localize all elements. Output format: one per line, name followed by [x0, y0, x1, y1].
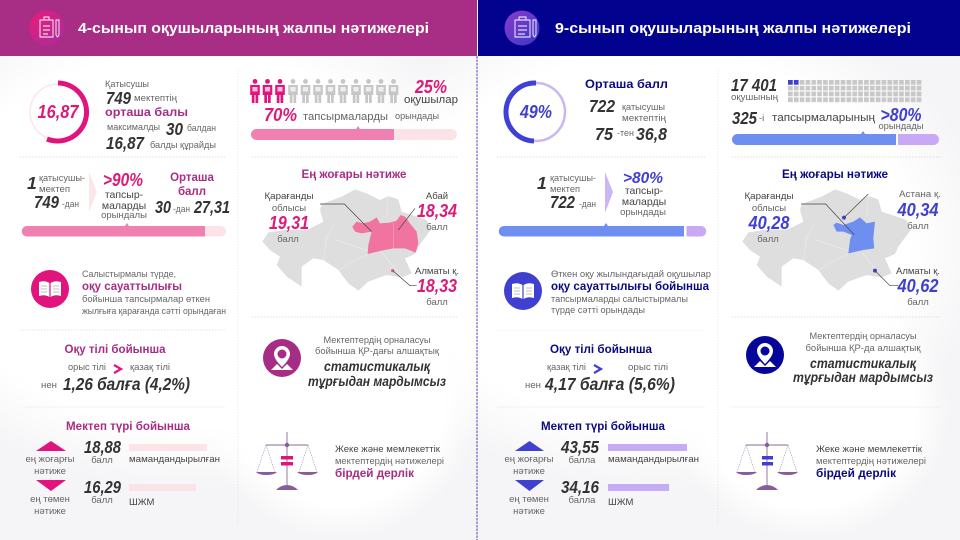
text: location: тұрғыдан мардымсыз: [793, 370, 933, 385]
text: reading literacy: оқу сауаттылығы бойынша: [551, 281, 710, 293]
school performance text: тапсыр-: [625, 185, 664, 197]
waffle caption: орындады: [878, 121, 924, 132]
heading: language: орыс тілі: [628, 362, 668, 373]
school performance text: маларды: [622, 196, 666, 208]
school performance text: Орташа: [170, 172, 215, 184]
school type section: мамандандырылған: [608, 454, 699, 465]
average score text: 36,8: [636, 124, 667, 144]
location icon: [263, 339, 301, 377]
school performance text: >80%: [623, 170, 663, 187]
text: location: статистикалық: [810, 356, 917, 371]
school performance text: балл: [178, 186, 206, 198]
school type section: Мектеп түрі бойынша: [541, 421, 666, 433]
heading: language: нен: [525, 380, 541, 391]
text: school ownership: Жеке және мемлекеттік: [816, 444, 923, 455]
school performance text: қатысушы-: [39, 173, 85, 184]
map labels: grade 9: Астана қ.: [899, 189, 941, 200]
average score text: мектептің: [134, 93, 178, 104]
map labels: grade 4: [264, 191, 459, 308]
school type section: нәтиже: [34, 466, 66, 477]
average score donut: [506, 83, 565, 141]
school type section: нәтиже: [513, 506, 545, 517]
header: grade 4: [0, 0, 477, 56]
school performance text: тапсыр-: [105, 189, 144, 201]
icon: book: [504, 272, 542, 310]
text: location: Мектептердің орналасуы: [324, 335, 431, 346]
text: school ownership: бірдей дерлік: [816, 468, 896, 480]
text: reading literacy: оқу сауаттылығы: [82, 281, 182, 293]
average score text: орташа балы: [105, 107, 188, 119]
map labels: grade 4: балл: [426, 222, 448, 233]
map labels: grade 4: балл: [426, 297, 448, 308]
text: reading literacy: Өткен оқу жылындағыдай оқушылар: [551, 269, 711, 280]
school type section: 43,55: [560, 437, 599, 457]
icon: clipboard: [30, 10, 64, 46]
map labels: grade 9: Алматы қ.: [896, 266, 940, 277]
text: location: бойынша ҚР-дағы алшақтық: [315, 346, 440, 357]
triangle down: [515, 480, 544, 491]
map labels: grade 4: 18,34: [417, 201, 457, 221]
map: Kazakhstan grade 4: [262, 189, 431, 291]
map labels: grade 9: балл: [907, 297, 929, 308]
text: reading literacy: [551, 269, 711, 316]
heading: top results: Ең жоғары нәтиже: [302, 169, 406, 181]
waffle caption: -і: [759, 113, 764, 124]
map labels: grade 4: Алматы қ.: [415, 266, 459, 277]
school performance text: 722: [550, 192, 575, 212]
school performance text: >90%: [103, 170, 143, 190]
school type section: Мектеп түрі бойынша: [66, 421, 191, 433]
highlighted regions: [352, 215, 418, 254]
panel: grade 9 results: [478, 0, 960, 525]
map labels: grade 4: 18,33: [417, 276, 457, 296]
school performance text: 1: [27, 173, 37, 193]
people chart caption: [264, 77, 458, 125]
school performance text: қатысушы-: [550, 173, 596, 184]
school performance text: мектеп: [550, 184, 580, 195]
heading: language: Оқу тілі бойынша: [64, 344, 166, 356]
arrow: [605, 172, 613, 213]
map labels: grade 9: Қарағанды: [744, 191, 794, 202]
progress bar: 80%: [499, 223, 706, 236]
text: reading literacy: бойынша тапсырмалар өткен: [82, 294, 210, 305]
waffle caption: тапсырмаларының: [772, 112, 875, 124]
people chart caption: тапсырмаларды: [303, 111, 388, 123]
triangle up: [515, 441, 544, 451]
heading: language: қазақ тілі: [130, 362, 170, 373]
people chart caption: орындады: [395, 111, 439, 122]
chevron: [114, 365, 121, 373]
location icon: [746, 336, 784, 374]
school performance text: -дан: [579, 199, 596, 210]
school performance text: [27, 170, 230, 221]
school type section: ШЖМ: [608, 497, 633, 508]
average score text: мектептің: [622, 113, 667, 124]
school performance text: [537, 170, 666, 218]
text: location: [793, 331, 933, 385]
waffle caption: оқушының: [731, 92, 779, 103]
map labels: grade 9: 40,62: [897, 276, 938, 296]
text: reading literacy: түрде сәтті орындады: [551, 305, 645, 316]
waffle caption: >80%: [880, 105, 922, 125]
average score text: 16,87: [106, 133, 145, 153]
panel: grade 4 results: [0, 0, 477, 525]
average score text: 75: [595, 124, 613, 144]
school type section: ең төмен: [509, 494, 549, 505]
text: location: тұрғыдан мардымсыз: [308, 374, 446, 389]
chevron: [594, 365, 601, 373]
average score text: 30: [166, 119, 183, 139]
map labels: grade 9: [744, 189, 941, 308]
map labels: grade 4: балл: [277, 234, 299, 245]
icon: book: [31, 270, 69, 308]
school type section: нәтиже: [34, 506, 66, 517]
school performance text: орындады: [620, 207, 666, 218]
text: location: Мектептердің орналасуы: [810, 331, 917, 342]
school type section: балл: [91, 455, 113, 466]
average score text: Орташа балл: [585, 79, 668, 91]
school performance text: 1: [537, 173, 547, 193]
highlighted region: [833, 217, 875, 253]
school type section: мамандандырылған: [129, 454, 220, 465]
map: Kazakhstan grade 9: [742, 189, 911, 291]
title: 9-сынып оқушыларының жалпы нәтижелері: [555, 20, 911, 37]
heading: language: 4,17 балға (5,6%): [544, 374, 675, 394]
school performance text: 749: [34, 192, 59, 212]
triangle down: [36, 480, 66, 491]
average score text: 722: [589, 96, 615, 116]
text: location: бойынша ҚР-да алшақтық: [806, 343, 921, 354]
progress bar: 90%: [22, 223, 226, 236]
heading: language: орыс тілі: [68, 362, 106, 373]
progress bar: 17 401 students: [732, 131, 939, 145]
school performance text: мектеп: [39, 184, 70, 195]
school type section: ең жоғарғы: [26, 454, 75, 465]
school type section: ең жоғарғы: [504, 454, 554, 465]
school type section: [504, 421, 699, 517]
heading: language: [41, 344, 190, 394]
text: school ownership: мектептердің нәтижелері: [335, 456, 444, 467]
text: reading literacy: тапсырмаларды салыстырмалы: [551, 294, 688, 305]
average score text: балды құрайды: [150, 140, 216, 151]
average score text: максималды: [107, 122, 160, 133]
people chart: 25% of students: [250, 79, 398, 103]
waffle caption: [731, 75, 924, 132]
progress bar: 70%: [251, 126, 457, 140]
average score donut: 49%: [519, 102, 552, 122]
text: school ownership: [335, 444, 444, 480]
school performance text: -дан: [173, 204, 190, 215]
average score text: -тен: [617, 128, 634, 139]
map labels: grade 4: 19,31: [269, 213, 309, 233]
school type section: 18,88: [84, 437, 121, 457]
average score text: Қатысушы: [105, 79, 149, 90]
text: reading literacy: жылғыға қарағанда сәтті орындаған: [82, 306, 226, 317]
waffle caption: 325: [732, 108, 757, 128]
waffle chart: students: [788, 80, 922, 103]
average score text: [105, 79, 216, 153]
school performance text: 27,31: [193, 197, 230, 217]
people chart caption: 70%: [264, 105, 297, 125]
triangle up: [36, 441, 66, 451]
school performance text: -дан: [62, 199, 79, 210]
heading: language: нен: [41, 380, 57, 391]
map labels: grade 9: 40,28: [748, 213, 790, 233]
map labels: grade 9: 40,34: [897, 200, 938, 220]
map labels: grade 4: облысы: [272, 203, 306, 214]
school type section: 34,16: [561, 477, 599, 497]
heading: top results: Ең жоғары нәтиже: [782, 169, 888, 181]
text: school ownership: мектептердің нәтижелері: [816, 456, 926, 467]
heading: language: қазақ тілі: [547, 362, 586, 373]
average score donut: 16,87: [38, 102, 79, 122]
school type section: балла: [569, 455, 596, 466]
icon: scale: [736, 432, 798, 490]
arrow: [89, 172, 97, 212]
average score donut: [30, 83, 87, 141]
school performance text: маларды: [102, 200, 146, 212]
school performance text: 30: [155, 197, 171, 217]
text: location: [308, 335, 446, 389]
average score text: қатысушы: [622, 102, 665, 113]
text: school ownership: [816, 444, 926, 480]
school type section: 16,29: [84, 477, 121, 497]
average score text: балдан: [187, 123, 216, 134]
map labels: grade 9: балл: [757, 234, 779, 245]
header: grade 9: [478, 0, 960, 56]
school performance text: орындалы: [101, 210, 147, 221]
text: school ownership: Жеке және мемлекеттік: [335, 444, 441, 455]
text: reading literacy: [82, 269, 226, 317]
icon: scale: [256, 432, 318, 490]
school type section: ШЖМ: [129, 497, 154, 508]
map labels: grade 9: балл: [907, 221, 929, 232]
map labels: grade 9: облысы: [752, 203, 786, 214]
people chart caption: оқушылар: [404, 94, 458, 106]
title: 4-сынып оқушыларының жалпы нәтижелері: [78, 20, 429, 37]
school type section: балла: [569, 495, 596, 506]
icon: clipboard: [504, 10, 540, 46]
school type section: ең төмен: [30, 494, 70, 505]
school type section: нәтиже: [513, 466, 545, 477]
heading: language: 1,26 балға (4,2%): [63, 374, 190, 394]
average score text: [585, 79, 668, 144]
heading: language: [525, 344, 675, 394]
waffle caption: 17 401: [731, 75, 777, 95]
map labels: grade 4: Қарағанды: [264, 191, 314, 202]
people chart caption: 25%: [414, 77, 447, 97]
school type section: балл: [91, 495, 113, 506]
school type section: [26, 421, 220, 517]
text: school ownership: бірдей дерлік: [335, 468, 414, 480]
heading: language: Оқу тілі бойынша: [550, 344, 653, 356]
map labels: grade 4: Абай: [426, 191, 448, 202]
text: location: статистикалық: [324, 359, 431, 374]
text: reading literacy: Салыстырмалы түрде,: [82, 269, 176, 280]
average score text: 749: [106, 88, 131, 108]
